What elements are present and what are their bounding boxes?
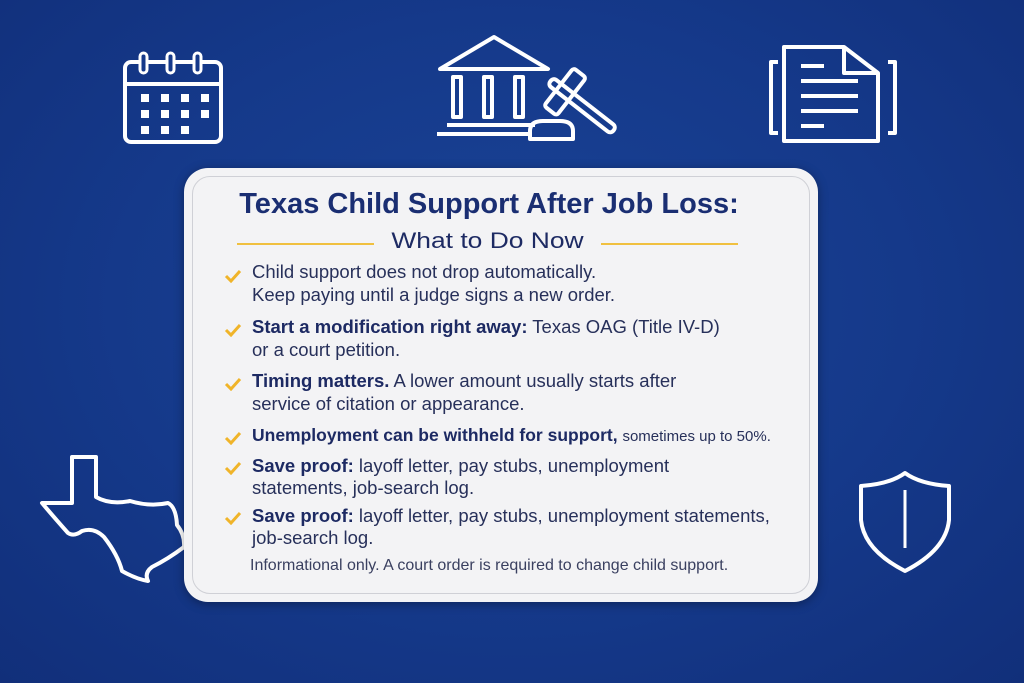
icon: texas map: [40, 455, 184, 583]
checklist: Start a modification right away: Texas OAG (Title IV-D): [252, 316, 720, 337]
checklist: Child support does not drop automatically.: [252, 261, 596, 282]
item 2: [225, 316, 720, 360]
card panel: [184, 168, 818, 602]
checklist: Keep paying until a judge signs a new order.: [252, 284, 615, 305]
checklist: job-search log.: [252, 527, 373, 548]
checklist: Save proof: layoff letter, pay stubs, unemployment statements,: [252, 505, 770, 526]
checklist: statements, job-search log.: [252, 477, 474, 498]
title: Texas Child Support After Job Loss:: [239, 188, 739, 220]
icon: courthouse with gavel: [437, 35, 617, 141]
item 1: [225, 261, 615, 305]
icon: shield: [859, 471, 951, 573]
checklist: Unemployment can be withheld for support, sometimes up to 50%.: [252, 425, 771, 445]
item 4: [225, 425, 771, 445]
icon: documents: [769, 45, 897, 143]
checklist: service of citation or appearance.: [252, 393, 525, 414]
footer disclaimer: Informational only. A court order is required to change child support.: [250, 557, 728, 574]
subtitle with rules: What to Do Now: [391, 228, 584, 253]
checklist: Timing matters. A lower amount usually starts after: [252, 370, 676, 391]
checklist: [225, 261, 771, 548]
item 3: [225, 370, 676, 414]
checklist: Save proof: layoff letter, pay stubs, unemployment: [252, 455, 669, 476]
item 5: [225, 455, 669, 498]
checklist: or a court petition.: [252, 339, 400, 360]
item 6: [225, 505, 770, 548]
icon: calendar: [123, 52, 223, 144]
